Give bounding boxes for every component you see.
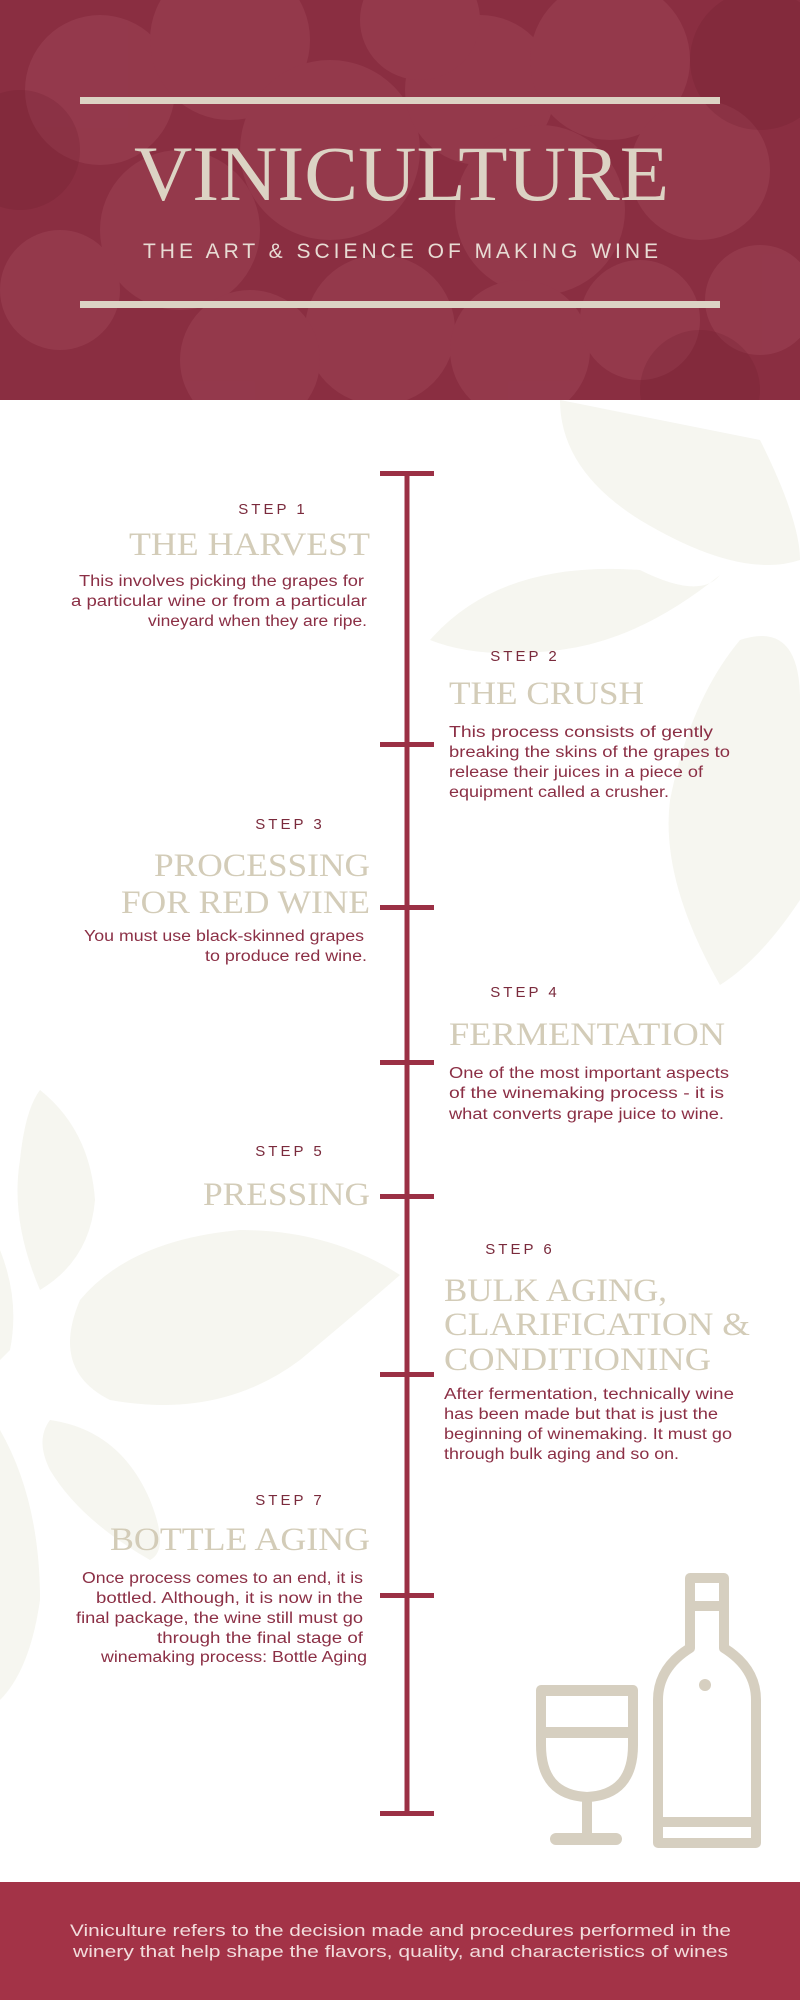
step 6: STEP 6 <box>485 1241 555 1258</box>
step 1: a particular wine or from a particular <box>71 593 367 610</box>
step 1: STEP 1 <box>238 501 308 518</box>
step 1: vineyard when they are ripe. <box>148 613 367 630</box>
timeline <box>380 471 434 1816</box>
step 1 <box>71 501 370 630</box>
step 2: release their juices in a piece of <box>449 764 704 781</box>
step 4 <box>448 984 729 1123</box>
step 7: final package, the wine still must go <box>76 1610 363 1627</box>
step 4: what converts grape juice to wine. <box>448 1106 724 1123</box>
step 1: This involves picking the grapes for <box>79 573 364 590</box>
step 7 <box>76 1492 370 1666</box>
step 2: breaking the skins of the grapes to <box>449 744 730 761</box>
step 7: STEP 7 <box>255 1492 325 1509</box>
step 2: equipment called a crusher. <box>449 784 669 801</box>
step 3: to produce red wine. <box>205 948 367 965</box>
step 7: winemaking process: Bottle Aging <box>100 1649 367 1666</box>
step 7: bottled. Although, it is now in the <box>96 1590 363 1607</box>
step 5: STEP 5 <box>255 1143 325 1160</box>
step 6: CONDITIONING <box>444 1342 711 1378</box>
step 3: STEP 3 <box>255 816 325 833</box>
step 4: FERMENTATION <box>449 1017 725 1053</box>
step 6: BULK AGING, <box>444 1273 667 1309</box>
step 2: This process consists of gently <box>449 724 713 741</box>
step 6: beginning of winemaking. It must go <box>444 1426 732 1443</box>
step 3 <box>84 816 370 965</box>
step 6: CLARIFICATION & <box>444 1307 750 1343</box>
step 4: of the winemaking process - it is <box>449 1085 724 1102</box>
step 5: PRESSING <box>203 1177 370 1213</box>
icon: wine glass <box>541 1686 633 1839</box>
step 6: through bulk aging and so on. <box>444 1446 679 1463</box>
step 7: through the final stage of <box>157 1630 364 1647</box>
header: grape photo band <box>0 0 800 400</box>
step 3: PROCESSING <box>154 848 370 884</box>
step 1: THE HARVEST <box>129 527 370 563</box>
icon: wine bottle <box>658 1578 756 1843</box>
header rule bottom <box>80 301 720 308</box>
subtitle: THE ART & SCIENCE OF MAKING WINE <box>143 240 658 263</box>
footer band: winery that help shape the flavors, quality, and characteristics of wines <box>72 1942 728 1961</box>
step 7: Once process comes to an end, it is <box>82 1570 363 1587</box>
step 7: BOTTLE AGING <box>110 1522 370 1558</box>
step 2: STEP 2 <box>490 648 560 665</box>
step 3: FOR RED WINE <box>121 885 370 921</box>
step 2: THE CRUSH <box>449 676 644 712</box>
footer band: Viniculture refers to the decision made and procedures performed in the <box>70 1921 731 1940</box>
background leaves <box>0 400 800 1700</box>
step 2 <box>449 648 730 801</box>
step 4: STEP 4 <box>490 984 560 1001</box>
header rule top <box>80 97 720 104</box>
step 6: After fermentation, technically wine <box>444 1386 734 1403</box>
step 4: One of the most important aspects <box>449 1065 729 1082</box>
step 6 <box>444 1241 750 1463</box>
title: VINICULTURE <box>134 130 669 217</box>
footer band <box>0 1882 800 2000</box>
step 6: has been made but that is just the <box>444 1406 718 1423</box>
step 3: You must use black-skinned grapes <box>84 928 364 945</box>
step 5 <box>203 1143 370 1213</box>
